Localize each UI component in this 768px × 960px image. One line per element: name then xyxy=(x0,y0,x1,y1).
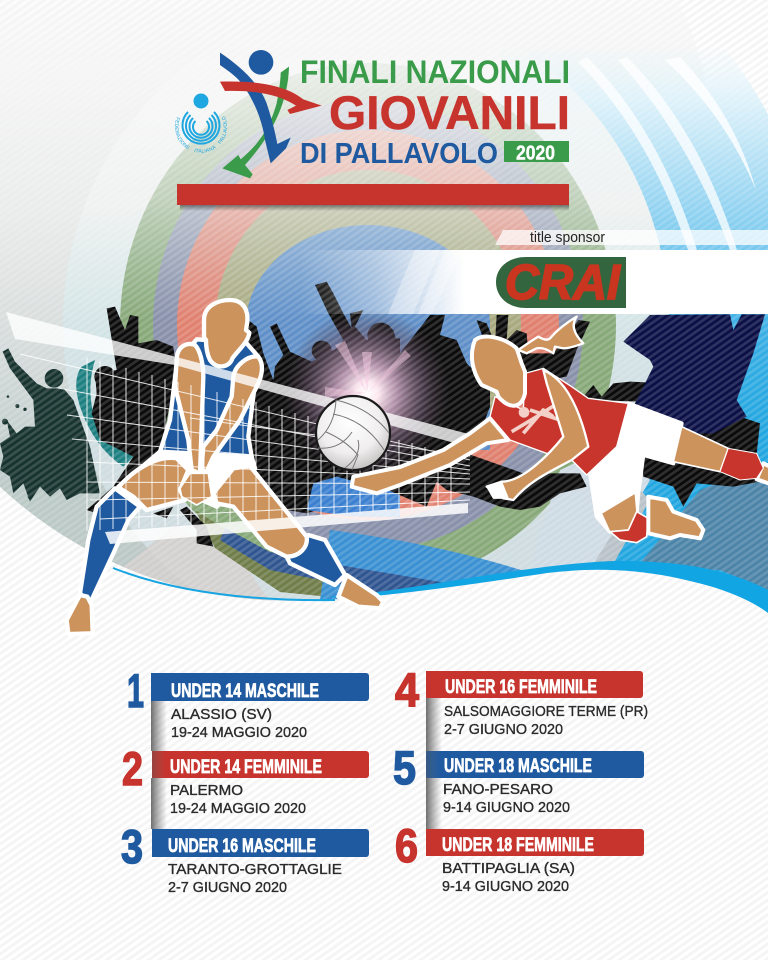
schedule: card 5 xyxy=(393,741,644,829)
schedule: card 2: UNDER 14 FEMMINILE xyxy=(170,756,322,778)
diagonal stripe overlay xyxy=(0,60,768,620)
schedule: card 5: UNDER 18 MASCHILE xyxy=(444,755,592,777)
schedule: card 4: UNDER 16 FEMMINILE xyxy=(445,676,597,698)
net bottom band xyxy=(105,503,468,544)
head xyxy=(204,300,249,366)
background: lower colour shapes xyxy=(120,440,768,602)
schedule: card 2 xyxy=(122,742,369,829)
head xyxy=(472,337,525,406)
schedule: card 6: 6 xyxy=(395,819,418,872)
title: FINALI NAZIONALI xyxy=(300,54,570,90)
male player xyxy=(67,300,383,634)
net grid xyxy=(20,354,470,531)
year badge xyxy=(504,141,569,164)
sponsor band xyxy=(300,250,768,314)
year badge: 2020 xyxy=(516,142,555,164)
volleyball net xyxy=(6,312,480,544)
thighs xyxy=(118,458,188,510)
schedule: card 6: UNDER 18 FEMMINILE xyxy=(442,834,594,856)
back arm xyxy=(352,418,508,493)
net top band xyxy=(6,312,480,450)
title sponsor bar: title sponsor xyxy=(530,230,605,246)
crowd silhouettes xyxy=(0,282,768,547)
schedule: card 1 xyxy=(127,664,369,751)
shorts xyxy=(590,403,682,532)
right lower leg xyxy=(287,535,345,585)
crowd: left teal figure xyxy=(0,348,133,502)
jersey xyxy=(490,368,628,475)
title: GIOVANILI xyxy=(329,86,570,139)
volleyball xyxy=(316,396,390,470)
logo figure xyxy=(220,50,322,178)
CRAI logo: CRAI xyxy=(505,256,621,310)
red banner xyxy=(177,184,569,211)
arms xyxy=(175,344,203,473)
schedule: card 3: 2-7 GIUGNO 2020 xyxy=(168,880,287,896)
schedule: card 1: 19-24 MAGGIO 2020 xyxy=(171,725,307,741)
schedule: card 3: TARANTO-GROTTAGLIE xyxy=(168,862,342,878)
ponytail xyxy=(518,317,583,353)
background: concentric rings xyxy=(0,45,768,601)
lower white wave xyxy=(0,487,768,960)
jersey xyxy=(160,339,258,457)
stage glow xyxy=(283,309,451,477)
schedule: card 4: 4 xyxy=(395,663,419,716)
FIPAV logo xyxy=(175,94,227,153)
jersey emblem xyxy=(512,405,565,437)
schedule: card 2: 2 xyxy=(122,742,143,795)
lower thigh xyxy=(602,493,637,532)
hands xyxy=(180,473,212,505)
schedule: card 3: UNDER 16 MASCHILE xyxy=(168,835,316,857)
schedule: card 3 xyxy=(121,820,369,896)
upper thigh xyxy=(673,427,728,472)
schedule: card 4: SALSOMAGGIORE TERME (PR) xyxy=(444,704,648,720)
schedule: card 1: UNDER 14 MASCHILE xyxy=(171,680,319,702)
shorts xyxy=(118,452,255,510)
schedule: card 6: BATTIPAGLIA (SA) xyxy=(442,861,575,877)
schedule: card 2: PALERMO xyxy=(170,783,243,799)
title sponsor bar xyxy=(495,230,768,246)
schedule: card 6: 9-14 GIUGNO 2020 xyxy=(442,879,569,895)
schedule: card 3: 3 xyxy=(121,820,143,873)
upper knee pad xyxy=(720,448,763,480)
front arm xyxy=(487,370,588,500)
schedule: card 1: 1 xyxy=(127,664,144,717)
schedule: card 6 xyxy=(395,819,644,895)
schedule: card 4: 2-7 GIUGNO 2020 xyxy=(444,722,563,738)
schedule: card 5: 5 xyxy=(393,741,416,794)
bright blue wave band xyxy=(330,561,768,620)
crowd: black figures right xyxy=(380,314,768,510)
crowd: black figures left xyxy=(87,282,400,547)
schedule: card 4 xyxy=(395,663,648,751)
schedule: card 2: 19-24 MAGGIO 2020 xyxy=(170,801,306,817)
blue edge arc xyxy=(113,568,335,600)
lower knee pad xyxy=(610,512,648,543)
title xyxy=(300,54,570,170)
foot xyxy=(648,497,703,538)
female player xyxy=(352,317,768,543)
FIPAV logo: FEDERAZIONE ITALIANA PALLAVOLO xyxy=(175,116,227,153)
schedule: card 5: 9-14 GIUGNO 2020 xyxy=(443,800,570,816)
left lower leg xyxy=(80,488,140,603)
schedule: card 5: FANO-PESARO xyxy=(443,782,553,798)
feet xyxy=(67,595,93,634)
title: DI PALLAVOLO xyxy=(300,138,498,170)
hand highlight xyxy=(487,482,508,498)
schedule: card 1: ALASSIO (SV) xyxy=(171,707,272,723)
